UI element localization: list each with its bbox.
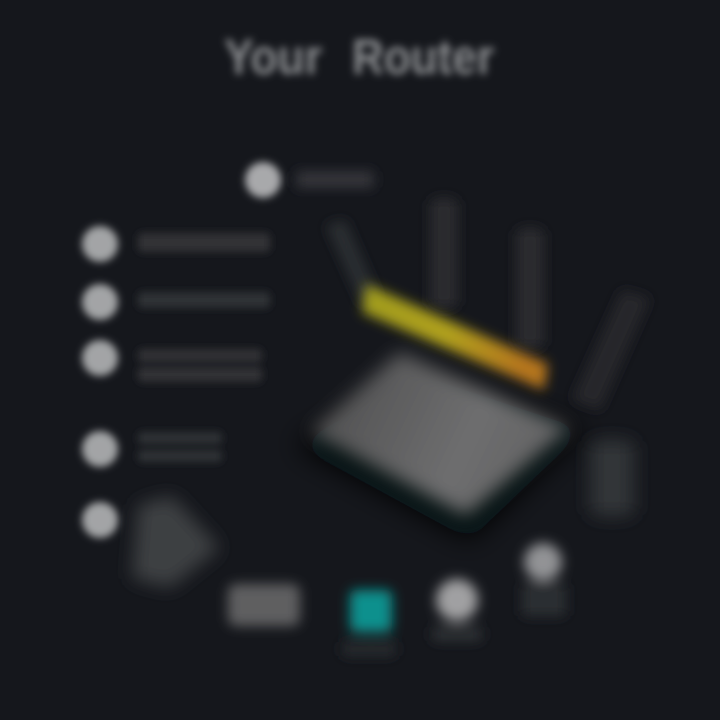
antenna 3 — [516, 228, 544, 348]
bottom icon 1 — [228, 584, 300, 626]
title — [224, 29, 494, 85]
bottom icon row — [228, 543, 566, 656]
icon: top feature — [245, 162, 281, 198]
bottom icon 2: teal — [342, 590, 396, 656]
router body — [310, 352, 570, 516]
feature list — [82, 226, 270, 538]
item 4 — [82, 431, 222, 467]
yellow band — [362, 284, 548, 390]
top feature item — [245, 162, 374, 198]
router illustration — [295, 198, 650, 540]
bottom icon 4 — [522, 543, 566, 616]
antenna 2 — [430, 198, 458, 308]
side connector — [590, 440, 634, 516]
item 1 — [82, 226, 270, 262]
item 5 — [82, 502, 118, 538]
title: Router — [352, 29, 494, 85]
icon: small device lower left — [132, 496, 220, 588]
antenna 1 — [326, 220, 380, 305]
antenna 4 — [572, 290, 650, 410]
item 2 — [82, 284, 270, 320]
bottom icon 3 — [432, 579, 482, 641]
title: Your — [224, 29, 322, 85]
item 3 — [82, 340, 262, 382]
text: top feature label — [296, 171, 374, 188]
shadow — [295, 375, 585, 540]
